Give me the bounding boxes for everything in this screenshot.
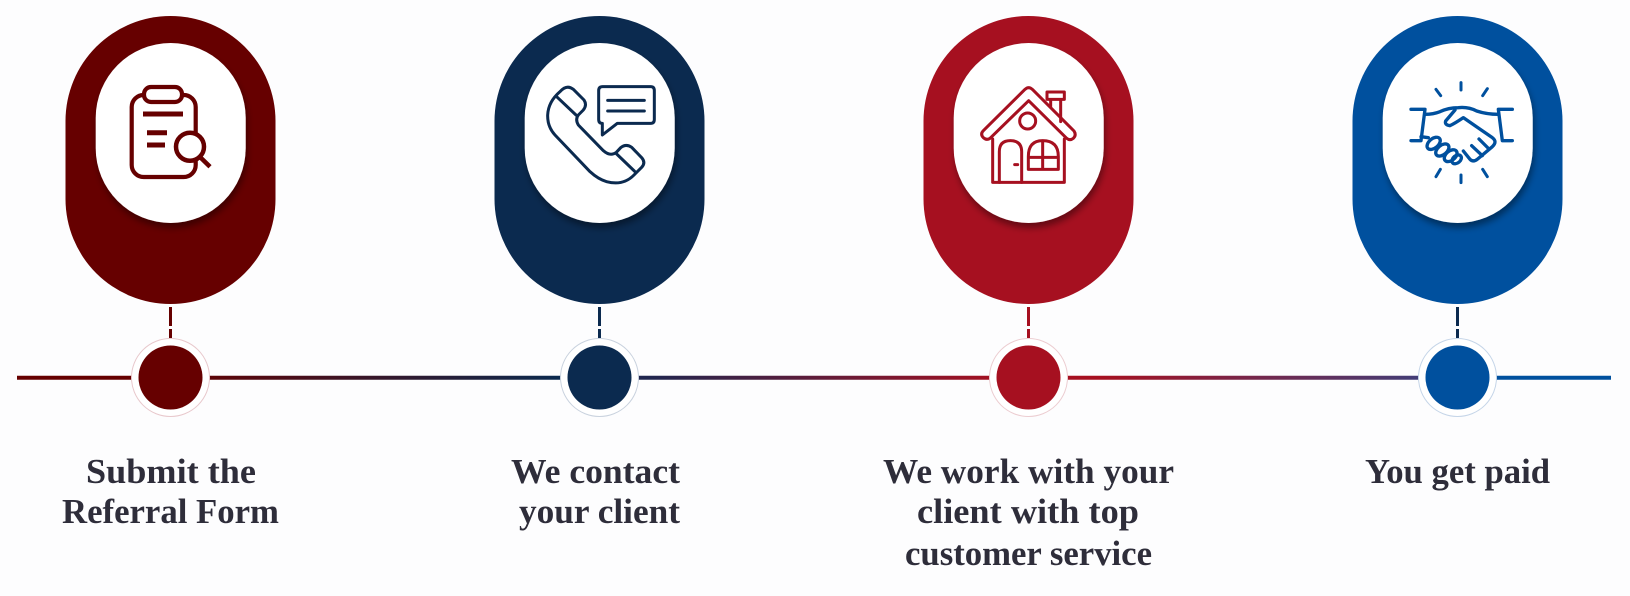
- pill marker 1: [66, 16, 276, 304]
- connector 4: [1456, 307, 1459, 338]
- label 3: customer service: [905, 534, 1152, 573]
- label 4: You get paid: [1365, 452, 1551, 491]
- label 1: [62, 452, 279, 531]
- node 2: [560, 338, 638, 416]
- label 1: Submit the: [86, 452, 256, 491]
- timeline line: [17, 376, 1611, 380]
- label 2: your client: [519, 492, 680, 531]
- icon holder 4: [1383, 43, 1533, 223]
- pill marker 2: [494, 16, 704, 304]
- label 2: We contact: [511, 452, 680, 491]
- node 4: [1418, 338, 1496, 416]
- step 2: we contact your client: [494, 16, 704, 531]
- label 3: We work with your: [883, 452, 1174, 491]
- step 3: we work with your client: [883, 16, 1174, 573]
- step 4: you get paid: [1352, 16, 1562, 491]
- icon holder 3: [954, 43, 1104, 223]
- step 1: submit the referral form: [62, 16, 279, 531]
- node 3: [990, 338, 1068, 416]
- icon holder 2: [525, 43, 675, 223]
- label 3: [883, 452, 1174, 573]
- pill marker 3: [924, 16, 1134, 304]
- label 2: [511, 452, 680, 531]
- label 1: Referral Form: [62, 492, 279, 531]
- connector 3: [1027, 307, 1030, 338]
- icon: handshake: [1411, 83, 1512, 183]
- node 1: [132, 338, 210, 416]
- icon: clipboard with magnifier: [132, 87, 210, 177]
- connector 2: [598, 307, 601, 338]
- icon holder 1: [96, 43, 246, 223]
- pill marker 4: [1352, 16, 1562, 304]
- label 3: client with top: [917, 492, 1139, 531]
- connector 1: [169, 307, 172, 338]
- icon: phone with speech bubble: [548, 87, 654, 183]
- icon: house: [982, 88, 1075, 182]
